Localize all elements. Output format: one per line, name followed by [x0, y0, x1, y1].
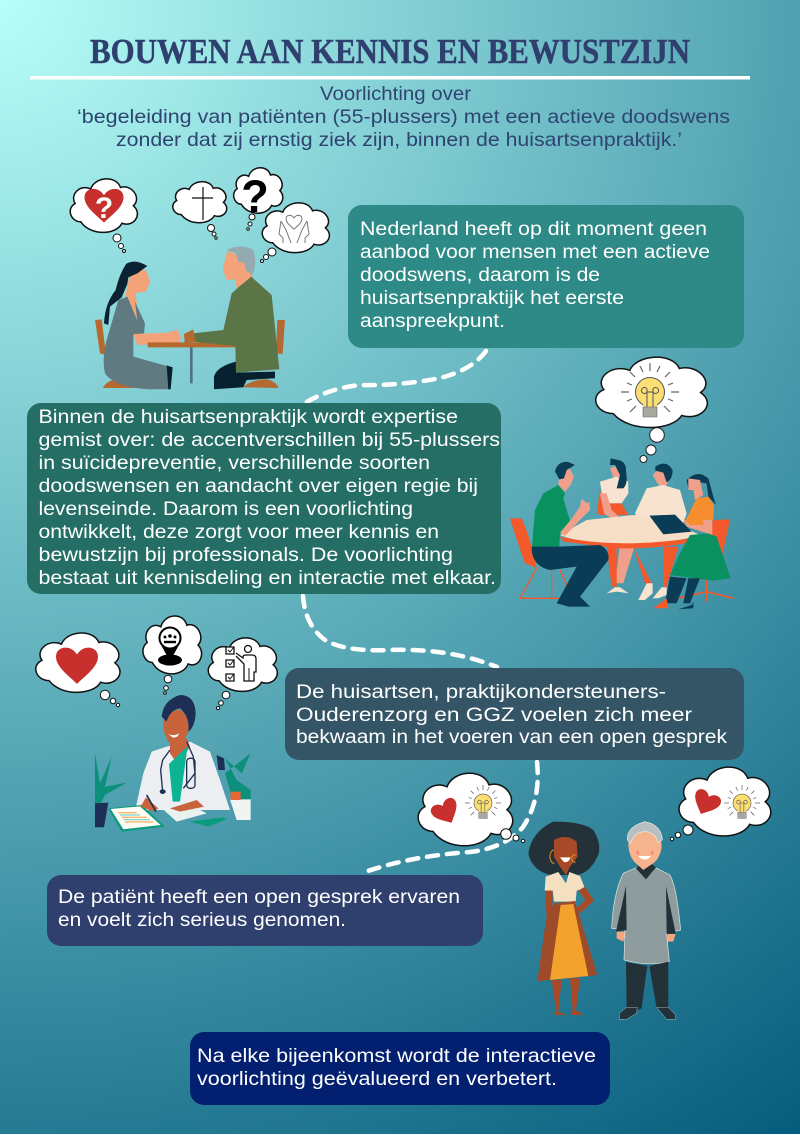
box 3: professionals feel more capable: Ouderenzorg en GGZ voelen zich meer — [296, 705, 693, 726]
illustration: patient pair with thought clouds — [418, 767, 771, 1019]
box 4: patient experience: en voelt zich serieus genomen. — [58, 910, 346, 931]
dashed connector: box 2 to box 3 — [303, 596, 497, 667]
thought cloud: heart with question mark — [70, 179, 137, 252]
thought cloud: cross — [173, 182, 227, 239]
thought cloud: question mark — [234, 168, 283, 230]
box 2: missing expertise: bewustzijn bij professionals. De voorlichting — [38, 545, 453, 566]
box 2: missing expertise: doodswensen en aandacht over eigen regie bij — [38, 476, 478, 497]
box 3: professionals feel more capable: De huisartsen, praktijkondersteuners- — [296, 682, 666, 703]
doctor at desk — [95, 695, 251, 832]
subtitle: ‘begeleiding van patiënten (55-plussers) met een actieve doodswens — [77, 106, 730, 128]
figures at table — [95, 246, 285, 389]
thought cloud: heart — [36, 633, 120, 707]
thought cloud: man — [670, 767, 771, 841]
box 2: missing expertise: Binnen de huisartsenpraktijk wordt expertise — [38, 407, 458, 428]
box 2: missing expertise: in suïcidepreventie, verschillende soorten — [38, 453, 430, 474]
box 2: missing expertise: ontwikkelt, deze zorgt voor meer kennis en — [38, 522, 439, 543]
illustration: doctor with thought clouds — [36, 616, 277, 832]
subtitle: zonder dat zij ernstig ziek zijn, binnen de huisartsenpraktijk.’ — [116, 129, 682, 151]
thought cloud: woman — [418, 773, 525, 846]
box 1: no offer in the Netherlands: Nederland heeft op dit moment geen — [360, 219, 707, 240]
thought cloud: light bulb — [596, 357, 707, 462]
thought cloud: question mark: ? — [241, 171, 269, 222]
subtitle: Voorlichting over — [320, 83, 472, 105]
box 5: evaluation: Na elke bijeenkomst wordt de interactieve — [197, 1046, 596, 1067]
box 1: no offer in the Netherlands: huisartsenpraktijk het eerste — [360, 288, 624, 309]
thought cloud: location pin with people — [143, 616, 202, 694]
thought cloud: heart with question mark: ? — [95, 192, 113, 225]
dashed connector: box 3 to box 4 — [362, 762, 538, 873]
box 5: evaluation — [190, 1032, 610, 1105]
box 2: missing expertise — [27, 403, 501, 594]
box 3: professionals feel more capable: bekwaam in het voeren van een open gesprek — [296, 727, 728, 748]
subtitle — [77, 83, 730, 151]
box 1: no offer in the Netherlands: doodswens, daarom is de — [360, 265, 600, 286]
box 5: evaluation: voorlichting geëvalueerd en verbetert. — [197, 1069, 557, 1090]
thought cloud: caring hands — [260, 203, 329, 262]
illustration: group meeting with light bulb — [510, 357, 733, 609]
box 1: no offer in the Netherlands: aanbod voor mensen met een actieve — [360, 242, 710, 263]
box 1: no offer in the Netherlands: aanspreekpunt. — [360, 311, 505, 332]
thought cloud: checklist with person — [208, 638, 277, 710]
box 3: professionals feel more capable — [285, 668, 744, 760]
title: BOUWEN AAN KENNIS EN BEWUSTZIJN — [90, 32, 690, 71]
box 2: missing expertise: levenseinde. Daarom is een voorlichting — [38, 499, 413, 520]
dashed connector: box 1 to box 2 — [305, 351, 486, 403]
box 2: missing expertise: gemist over: de accentverschillen bij 55-plussers — [38, 430, 500, 451]
four people around table — [510, 458, 733, 609]
illustration: couple at table with thought clouds — [70, 168, 329, 389]
box 1: no offer in the Netherlands — [348, 205, 744, 348]
box 4: patient experience — [47, 875, 483, 946]
box 2: missing expertise: bestaat uit kennisdeling en interactie met elkaar. — [38, 568, 496, 589]
woman and man standing — [528, 822, 681, 1019]
box 4: patient experience: De patiënt heeft een open gesprek ervaren — [58, 887, 460, 908]
